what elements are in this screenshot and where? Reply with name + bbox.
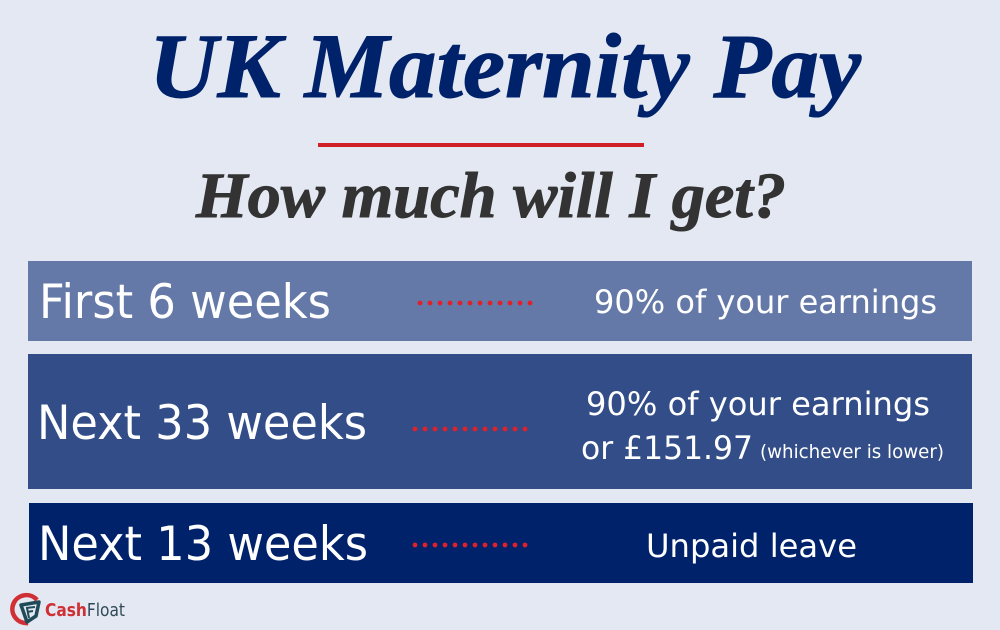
qualifier note: (whichever is lower) xyxy=(760,441,944,463)
icon: logo mark xyxy=(12,595,39,623)
pay text: 90% of your earnings xyxy=(594,283,937,321)
period label: next 13 weeks: Next 13 weeks xyxy=(38,517,368,572)
subtitle: How much will I get? xyxy=(195,160,786,232)
logo: CashFloat xyxy=(12,595,125,623)
pay text line 1: 90% of your earnings xyxy=(586,385,930,423)
period label: next 33 weeks: Next 33 weeks xyxy=(37,396,367,451)
panel: first 6 weeks xyxy=(28,261,972,341)
dotted connector xyxy=(418,301,532,305)
wordmark: CashFloat xyxy=(45,600,125,621)
pay text line 2: or £151.97 xyxy=(581,429,753,467)
panel: next 13 weeks xyxy=(29,503,973,583)
dotted connector xyxy=(413,543,527,547)
period label: first 6 weeks: First 6 weeks xyxy=(39,275,331,330)
dotted connector xyxy=(413,427,527,431)
pay text: Unpaid leave xyxy=(646,527,857,565)
title: UK Maternity Pay xyxy=(149,15,862,117)
panel: next 33 weeks xyxy=(28,354,972,489)
red divider under title xyxy=(318,143,644,147)
